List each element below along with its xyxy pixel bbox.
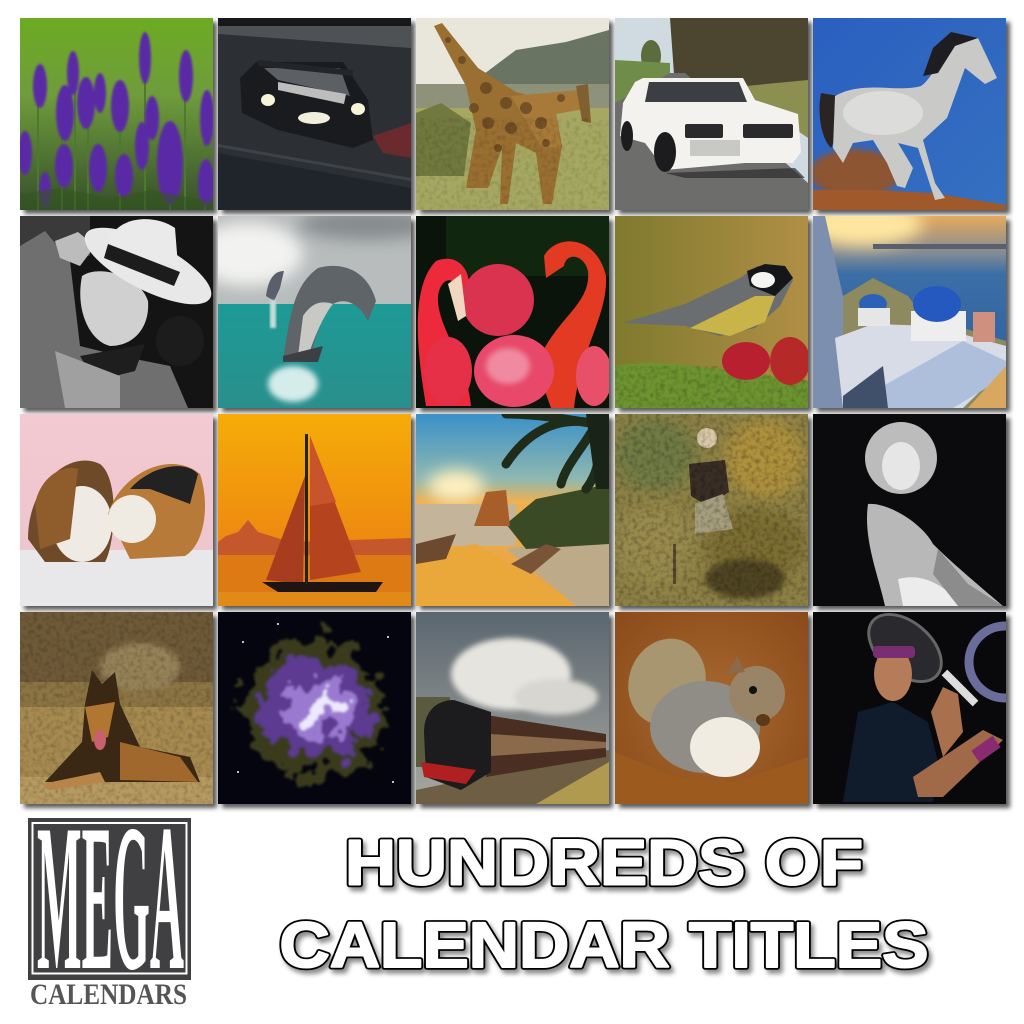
photo tile: German shepherd on straw bbox=[20, 612, 213, 804]
text: MEGA bbox=[37, 782, 184, 1014]
title line 1 outline: HUNDREDS OF bbox=[345, 826, 863, 898]
photo tile: great tit on apples bbox=[615, 216, 810, 408]
title line 1: HUNDREDS OF bbox=[345, 826, 863, 898]
logo box bbox=[28, 818, 191, 980]
photo tile: white car on road bbox=[615, 18, 808, 210]
logo: Mega Calendars bbox=[28, 782, 191, 1014]
photo tile: race car bbox=[218, 18, 411, 210]
photo tile: impressionist painting bbox=[615, 414, 808, 606]
photo tile: squirrel bbox=[615, 612, 808, 804]
title: Hundreds of Calendar Titles bbox=[280, 826, 928, 981]
photo tile: sailboat at sunset bbox=[218, 414, 411, 606]
photo tile: tennis player bbox=[813, 601, 1024, 804]
photo tile: dolphin bbox=[218, 216, 418, 416]
photo tile: steam train bbox=[416, 612, 609, 804]
photo tile: guinea pigs bbox=[20, 414, 213, 606]
logo wordmark: CALENDARS: CALENDARS bbox=[30, 978, 187, 1011]
photo tile: Santorini bbox=[803, 202, 1006, 408]
photo tile: flamingos bbox=[416, 216, 612, 408]
photo tile: lavender field bbox=[18, 18, 214, 210]
photo tile: woman in boater hat bbox=[20, 213, 221, 408]
title line 2 outline: CALENDAR TITLES bbox=[280, 909, 928, 981]
photo tile: tropical beach bbox=[416, 414, 609, 606]
photo tile: giraffes bbox=[416, 18, 616, 218]
photo tile: Marilyn Monroe bbox=[813, 414, 1006, 606]
photo tile: white horse bbox=[810, 18, 1006, 210]
photo tile: crab nebula bbox=[218, 612, 411, 804]
title line 2: CALENDAR TITLES bbox=[280, 909, 928, 981]
